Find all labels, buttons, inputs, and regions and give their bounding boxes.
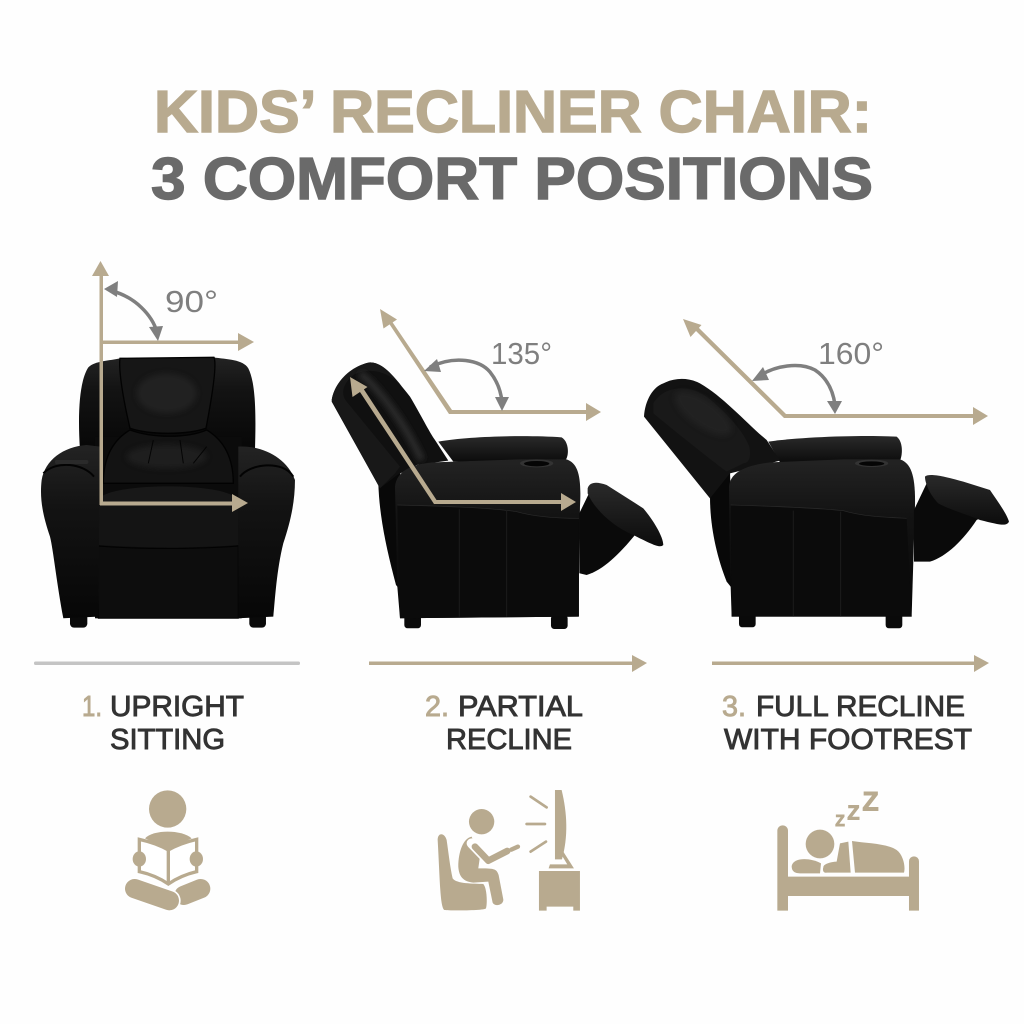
- arrow: column 2: [369, 655, 647, 672]
- arrow: upper horizontal: [101, 333, 254, 351]
- icon: child sleeping in bed: Z: [835, 813, 845, 830]
- chair 3 photo illustration: [644, 379, 1009, 628]
- label: partial recline: RECLINE: [446, 724, 572, 756]
- arrow: column 3: [712, 655, 989, 672]
- label: partial recline: PARTIAL: [458, 691, 583, 723]
- label: upright sitting: UPRIGHT: [110, 691, 244, 723]
- angle arc 135: [424, 359, 509, 411]
- title: [151, 79, 873, 212]
- title line 1: KIDS’ RECLINER CHAIR:: [154, 79, 872, 145]
- label: partial recline: 2.: [425, 691, 449, 723]
- angle arc 160: [752, 366, 842, 414]
- label: full recline with footrest: WITH FOOTREST: [724, 724, 972, 756]
- label: upright sitting: 1.: [82, 691, 102, 723]
- arrow: inner backrest and seat: [350, 377, 576, 511]
- divider: column 1: [34, 662, 300, 665]
- arrow: 160 degree backrest line: [683, 319, 988, 425]
- arrow: 135 degree backrest line: [380, 309, 601, 421]
- label: full recline with footrest: [722, 691, 972, 756]
- label: full recline with footrest: 3.: [722, 691, 746, 723]
- angle arc 90: [104, 281, 163, 341]
- label: upright sitting: [82, 691, 244, 756]
- panel: full recline chair: [644, 319, 1009, 628]
- title line 2: 3 COMFORT POSITIONS: [151, 146, 873, 212]
- arrow: backrest axis: [92, 261, 109, 505]
- icon: child watching tv: [438, 790, 580, 911]
- panel: upright chair: [41, 261, 295, 628]
- label: full recline with footrest: FULL RECLINE: [756, 691, 965, 723]
- icon: child reading: [133, 790, 203, 901]
- label: partial recline: [425, 691, 583, 756]
- label: upright sitting: SITTING: [110, 724, 225, 756]
- angle label 135: 135°: [491, 336, 552, 371]
- icon: child sleeping in bed: [777, 787, 919, 911]
- arrow: seat axis: [100, 494, 248, 512]
- icon: child sleeping in bed: Z: [847, 802, 860, 824]
- angle label 90: 90°: [165, 284, 218, 319]
- icon: child sleeping in bed: Z: [862, 787, 879, 817]
- chair 1 photo illustration: [41, 357, 295, 628]
- chair 2 photo illustration: [332, 362, 663, 629]
- angle label 160: 160°: [818, 336, 884, 371]
- panel: partial recline chair: [332, 309, 663, 629]
